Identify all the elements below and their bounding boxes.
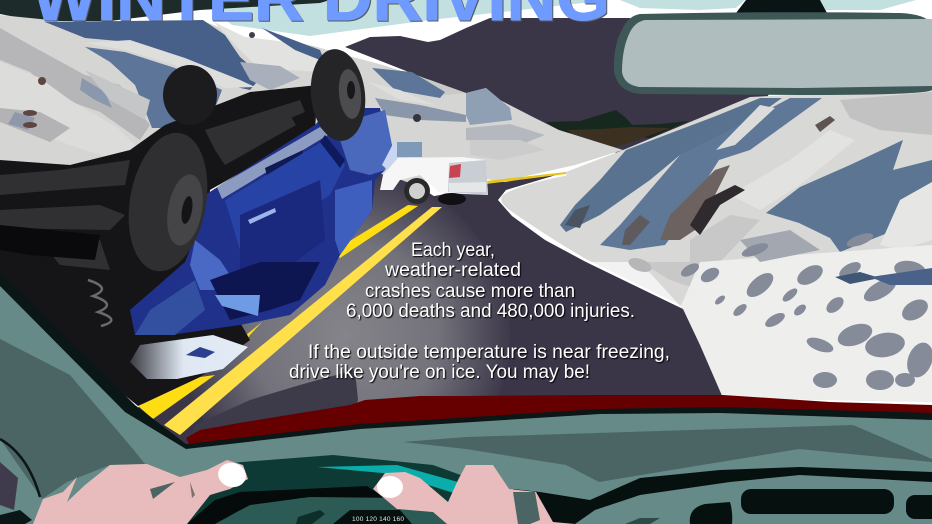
dash vents xyxy=(625,489,932,524)
thumbnail xyxy=(215,460,249,490)
snow at crash xyxy=(130,335,248,379)
upper wheel xyxy=(306,46,370,144)
yellow centre lines xyxy=(138,172,566,435)
rear wheel xyxy=(163,65,217,125)
statistic text xyxy=(346,240,635,322)
car interior dashboard xyxy=(0,272,932,524)
statistic text: crashes cause more than xyxy=(365,281,575,302)
statistic text: weather-related xyxy=(384,260,521,281)
white pickup truck xyxy=(380,142,488,205)
windscreen lower edge xyxy=(186,395,932,446)
overturned blue truck xyxy=(0,46,402,406)
left hand xyxy=(33,460,249,524)
dash black curve xyxy=(513,467,932,524)
statistic text: 6,000 deaths and 480,000 injuries. xyxy=(346,301,635,322)
undercarriage xyxy=(0,85,318,406)
right hand xyxy=(373,465,575,524)
advice text xyxy=(289,342,670,383)
speedometer: 100 120 140 160 xyxy=(352,516,404,523)
sky xyxy=(0,0,932,130)
rear-view mirror xyxy=(614,0,932,95)
steering wheel xyxy=(185,455,570,524)
dash panel xyxy=(0,286,932,524)
left snowy mountain xyxy=(0,15,623,185)
thumbnail xyxy=(377,476,403,498)
background dark mountain xyxy=(345,18,770,155)
right snowy mountain xyxy=(496,88,932,402)
advice text: drive like you're on ice. You may be! xyxy=(289,362,590,383)
left vent xyxy=(0,439,40,497)
front wheel xyxy=(118,126,218,278)
grey rock blotches xyxy=(627,231,932,390)
statistic text: Each year, xyxy=(411,240,495,261)
road xyxy=(135,170,932,500)
snow edge line along the road xyxy=(499,173,680,308)
speedometer xyxy=(333,510,412,524)
blue body xyxy=(130,108,392,335)
advice text: If the outside temperature is near freezing, xyxy=(308,342,670,363)
pillar shadow xyxy=(0,339,145,499)
